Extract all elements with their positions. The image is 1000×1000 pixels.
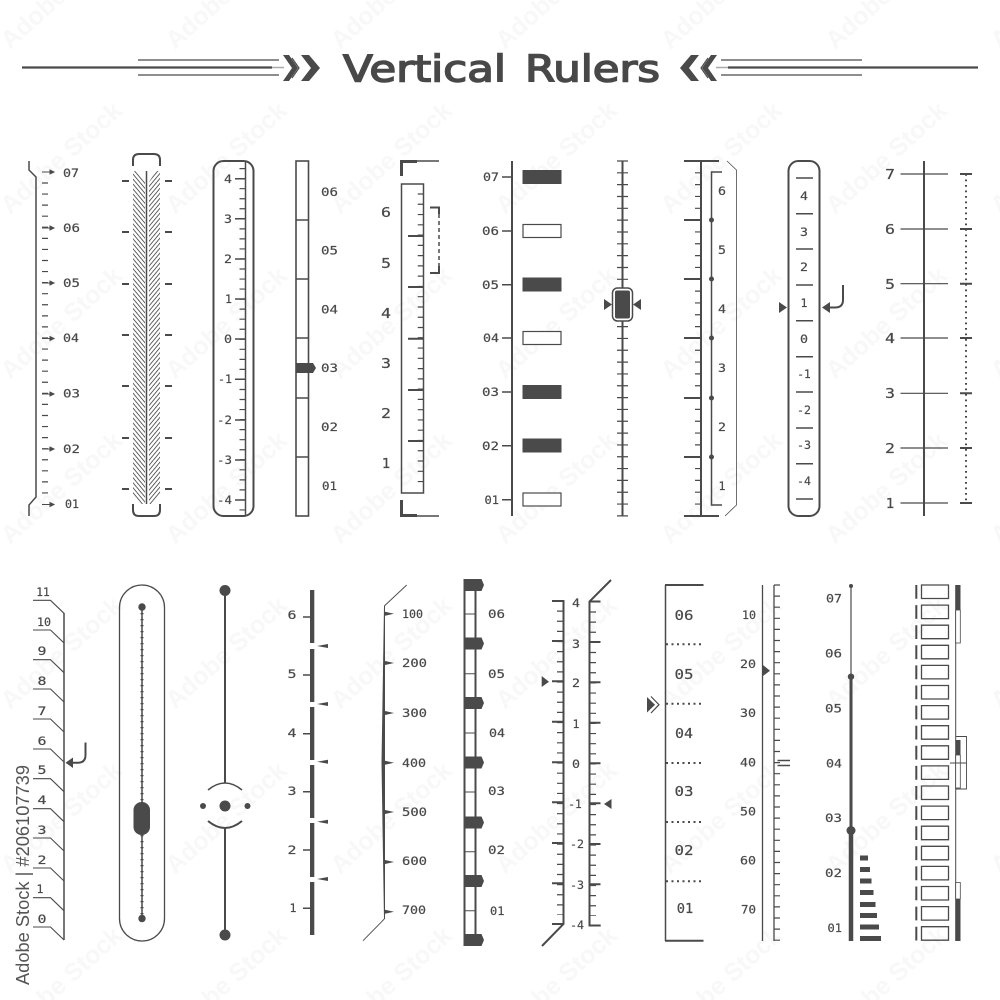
ruler 18: bracket with dotted dividers: 06 — [674, 608, 694, 624]
ruler 4: segmented column with pointer: 02 — [321, 420, 338, 434]
ruler 6: spine with filled and hollow bars: 06 — [482, 224, 499, 238]
ruler 19: fine scale 10 to 70: 40 — [740, 756, 756, 770]
title banner — [22, 48, 978, 90]
ruler 3: rounded scale -4 to 4: -3 — [217, 453, 232, 467]
ruler 18: bracket with dotted dividers: 02 — [674, 843, 694, 859]
ruler 2: hatched chevron band — [122, 154, 172, 516]
ruler 8: double scale with dotted inner bracket: 5 — [718, 243, 726, 257]
ruler 14: broken thick spine — [288, 590, 328, 935]
ruler 15: tapered spine 100 to 700: 500 — [402, 805, 427, 819]
ruler 18: bracket with dotted dividers: 05 — [674, 667, 694, 683]
ruler 15: tapered spine 100 to 700: 700 — [402, 903, 426, 917]
ruler 14: broken thick spine: 1 — [290, 901, 297, 915]
ruler 11: angled leader lines 0 to 11 with arrow: 9 — [38, 644, 47, 658]
ruler 3: rounded scale -4 to 4: -2 — [217, 413, 232, 427]
ruler 11: angled leader lines 0 to 11 with arrow: 5 — [38, 763, 46, 777]
ruler 19: fine scale 10 to 70: 70 — [741, 903, 756, 917]
ruler 17: twin facing scales: -2 — [570, 837, 584, 851]
ruler 15: tapered spine 100 to 700: 100 — [402, 607, 423, 621]
ruler 20: progressive line with stepped bars: 05 — [825, 702, 842, 716]
ruler 6: spine with filled and hollow bars: 04 — [483, 331, 499, 345]
ruler 9: rounded cells -4 to 4 with arrow: 2 — [800, 260, 808, 274]
ruler 1: bracket with arrows: 01 — [65, 497, 79, 511]
ruler 3: rounded scale -4 to 4: -1 — [218, 372, 232, 386]
ruler 6: spine with filled and hollow bars: 01 — [484, 493, 499, 507]
ruler 10: cross lines with dotted scale: 6 — [885, 222, 895, 238]
ruler 12: capsule slider — [120, 585, 164, 941]
ruler 4: segmented column with pointer: 06 — [321, 185, 338, 199]
ruler 11: angled leader lines 0 to 11 with arrow: 6 — [38, 734, 47, 748]
ruler 4: segmented column with pointer: 04 — [321, 302, 338, 316]
ruler 9: rounded cells -4 to 4 with arrow: 3 — [800, 225, 808, 239]
ruler 19: fine scale 10 to 70: 60 — [740, 854, 756, 868]
ruler 9: rounded cells -4 to 4 with arrow: 0 — [800, 332, 808, 346]
ruler 8: double scale with dotted inner bracket: 2 — [718, 420, 726, 434]
ruler 20: progressive line with stepped bars: 01 — [828, 921, 842, 935]
ruler 4: segmented column with pointer: 01 — [322, 479, 337, 493]
title text: Rulers — [525, 48, 660, 90]
ruler 11: angled leader lines 0 to 11 with arrow: 2 — [38, 853, 46, 867]
ruler 14: broken thick spine: 2 — [288, 843, 296, 857]
ruler 10: cross lines with dotted scale: 4 — [885, 331, 895, 347]
ruler 6: spine with filled and hollow bars: 05 — [482, 278, 499, 292]
ruler 8: double scale with dotted inner bracket — [684, 161, 736, 516]
right title ornament — [680, 55, 978, 81]
ruler 17: twin facing scales — [542, 580, 612, 946]
ruler 17: twin facing scales: -4 — [570, 918, 584, 932]
ruler 10: cross lines with dotted scale: 2 — [885, 441, 895, 457]
vertical stock id text: Adobe Stock | #206107739 — [13, 765, 33, 985]
ruler 19: fine scale 10 to 70 — [740, 584, 790, 942]
ruler 3: rounded scale -4 to 4: -4 — [217, 493, 232, 507]
ruler 15: tapered spine 100 to 700: 200 — [402, 656, 427, 670]
ruler 13: line with ring control — [200, 585, 250, 940]
ruler 16: column with pointer tabs: 06 — [488, 607, 505, 621]
ruler 9: rounded cells -4 to 4 with arrow: -4 — [797, 474, 811, 488]
ruler 19: fine scale 10 to 70: 10 — [742, 608, 756, 622]
ruler 14: broken thick spine: 4 — [288, 726, 297, 740]
ruler 18: bracket with dotted dividers: 03 — [674, 784, 694, 800]
ruler 9: rounded cells -4 to 4 with arrow: -1 — [797, 367, 811, 381]
ruler 1: bracket with arrows: 04 — [63, 331, 79, 345]
ruler 16: column with pointer tabs: 03 — [488, 784, 505, 798]
ruler 10: cross lines with dotted scale: 5 — [885, 277, 895, 293]
slider handle — [604, 288, 641, 321]
ruler 9: rounded cells -4 to 4 with arrow: 4 — [800, 189, 808, 203]
ruler 3: rounded scale -4 to 4: 3 — [224, 212, 232, 226]
ruler 1: bracket with arrows: 06 — [63, 221, 80, 235]
ruler 17: twin facing scales: 0 — [572, 757, 580, 771]
ruler 21: cell column with side gauges — [916, 585, 966, 941]
ruler 7: ticked line with slider handle — [604, 160, 641, 517]
ruler 11: angled leader lines 0 to 11 with arrow: 0 — [38, 912, 47, 926]
ruler 4: segmented column with pointer: 03 — [321, 361, 338, 375]
ruler 6: spine with filled and hollow bars — [482, 161, 562, 516]
ruler 4: segmented column with pointer — [296, 161, 338, 516]
ruler 11: angled leader lines 0 to 11 with arrow: 3 — [38, 823, 47, 837]
ruler 17: twin facing scales: -3 — [570, 878, 584, 892]
ruler 17: twin facing scales: 4 — [572, 596, 580, 610]
left title ornament — [22, 55, 320, 81]
ruler 8: double scale with dotted inner bracket: 3 — [718, 361, 726, 375]
ruler 10: cross lines with dotted scale: 1 — [886, 496, 894, 512]
dashed side bracket — [430, 208, 439, 273]
ruler 8: double scale with dotted inner bracket: 6 — [718, 184, 726, 198]
ruler 20: progressive line with stepped bars: 04 — [826, 756, 842, 770]
curved arrow — [66, 742, 86, 768]
ruler 19: fine scale 10 to 70: 30 — [740, 706, 756, 720]
ruler 18: bracket with dotted dividers: 01 — [677, 901, 693, 917]
curved arrow — [822, 285, 843, 313]
ruler 17: twin facing scales: 3 — [572, 637, 580, 651]
ruler 15: tapered spine 100 to 700: 600 — [402, 854, 427, 868]
ruler 10: cross lines with dotted scale: 7 — [885, 167, 895, 183]
ruler 5: boxed scale with corner brackets: 4 — [381, 306, 391, 322]
ruler 3: rounded scale -4 to 4: 0 — [224, 332, 232, 346]
ruler 1: bracket with arrows: 03 — [63, 386, 80, 400]
ruler 11: angled leader lines 0 to 11 with arrow: 8 — [38, 674, 47, 688]
ruler 5: boxed scale with corner brackets: 1 — [382, 456, 390, 472]
ruler 5: boxed scale with corner brackets: 3 — [381, 356, 391, 372]
ruler 20: progressive line with stepped bars: 03 — [825, 811, 842, 825]
ruler 14: broken thick spine: 3 — [288, 784, 297, 798]
ruler 5: boxed scale with corner brackets — [381, 161, 439, 516]
ruler 3: rounded scale -4 to 4: 4 — [224, 172, 232, 186]
stepped bars — [860, 856, 881, 941]
ruler 10: cross lines with dotted scale: 3 — [885, 386, 895, 402]
ruler 14: broken thick spine: 6 — [288, 608, 297, 622]
ruler 3: rounded scale -4 to 4: 1 — [225, 292, 232, 306]
ruler 19: fine scale 10 to 70: 20 — [740, 657, 756, 671]
ruler 9: rounded cells -4 to 4 with arrow — [779, 161, 843, 516]
ruler 11: angled leader lines 0 to 11 with arrow — [33, 585, 86, 940]
ruler 4: segmented column with pointer: 05 — [321, 244, 338, 258]
ruler 9: rounded cells -4 to 4 with arrow: -2 — [797, 403, 811, 417]
ruler 1: bracket with arrows: 05 — [63, 276, 80, 290]
ruler 3: rounded scale -4 to 4: 2 — [224, 252, 232, 266]
ruler 11: angled leader lines 0 to 11 with arrow: 11 — [36, 585, 50, 599]
ruler 16: column with pointer tabs: 01 — [490, 904, 505, 918]
ruler 18: bracket with dotted dividers: 04 — [675, 726, 693, 742]
ruler 10: cross lines with dotted scale — [885, 161, 972, 516]
ruler 16: column with pointer tabs: 02 — [488, 843, 505, 857]
title text — [343, 48, 660, 90]
ruler 11: angled leader lines 0 to 11 with arrow: 4 — [38, 793, 47, 807]
ruler 20: progressive line with stepped bars: 07 — [826, 592, 842, 606]
ruler 20: progressive line with stepped bars: 02 — [825, 866, 842, 880]
ruler 1: bracket with arrows: 02 — [63, 442, 80, 456]
ruler 18: bracket with dotted dividers — [647, 585, 704, 941]
ruler 17: twin facing scales: -1 — [568, 797, 582, 811]
ruler 1: bracket with arrows: 07 — [63, 166, 79, 180]
ruler 16: column with pointer tabs: 04 — [489, 726, 505, 740]
ruler 11: angled leader lines 0 to 11 with arrow: 1 — [36, 882, 44, 896]
ruler 5: boxed scale with corner brackets: 6 — [381, 205, 391, 221]
ruler 8: double scale with dotted inner bracket: 1 — [718, 479, 726, 493]
ruler 5: boxed scale with corner brackets: 5 — [381, 256, 391, 272]
ruler 17: twin facing scales: 2 — [572, 676, 580, 690]
ruler 6: spine with filled and hollow bars: 03 — [482, 385, 499, 399]
ruler 9: rounded cells -4 to 4 with arrow: 1 — [800, 296, 808, 310]
ruler 11: angled leader lines 0 to 11 with arrow: 10 — [37, 615, 51, 629]
ruler 15: tapered spine 100 to 700 — [363, 585, 427, 941]
title text: Vertical — [343, 48, 506, 90]
ruler 16: column with pointer tabs: 05 — [488, 667, 505, 681]
ruler 11: angled leader lines 0 to 11 with arrow: 7 — [38, 704, 47, 718]
ruler 8: double scale with dotted inner bracket: 4 — [718, 302, 726, 316]
ruler 17: twin facing scales: 1 — [572, 717, 580, 731]
ruler 19: fine scale 10 to 70: 50 — [740, 804, 756, 818]
ruler 6: spine with filled and hollow bars: 02 — [482, 439, 499, 453]
ruler 9: rounded cells -4 to 4 with arrow: -3 — [797, 438, 811, 452]
ruler 5: boxed scale with corner brackets: 2 — [381, 406, 391, 422]
double chevron pointer — [647, 696, 659, 713]
ruler 16: column with pointer tabs — [464, 579, 505, 946]
ruler 15: tapered spine 100 to 700: 400 — [402, 756, 426, 770]
ruler 1: bracket with arrows — [29, 161, 80, 516]
ruler 14: broken thick spine: 5 — [288, 667, 296, 681]
ruler 20: progressive line with stepped bars — [825, 584, 881, 941]
ruler 6: spine with filled and hollow bars: 07 — [483, 170, 499, 184]
ruler 3: rounded scale -4 to 4 — [214, 161, 254, 516]
ruler 15: tapered spine 100 to 700: 300 — [402, 706, 427, 720]
ruler 20: progressive line with stepped bars: 06 — [825, 646, 842, 660]
